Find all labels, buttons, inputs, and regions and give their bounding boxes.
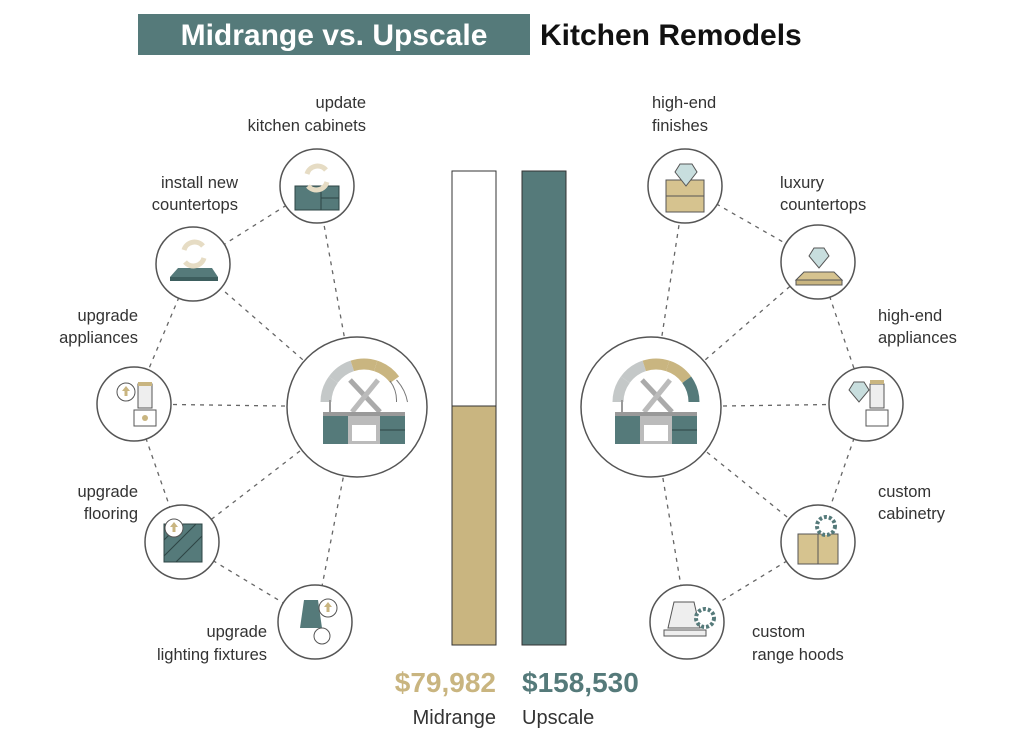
text: right labels: finishes bbox=[652, 117, 708, 135]
text: left labels: upgrade bbox=[206, 623, 267, 641]
text: right labels: range hoods bbox=[752, 646, 844, 664]
title: Kitchen Remodels bbox=[540, 19, 802, 52]
icon: luxury countertops bbox=[781, 225, 855, 299]
values: $158,530 bbox=[522, 667, 639, 698]
icon: custom cabinetry bbox=[781, 505, 855, 579]
text: left labels bbox=[59, 94, 366, 664]
text: left labels: kitchen cabinets bbox=[248, 117, 366, 135]
text: right labels: custom bbox=[752, 623, 805, 641]
bar labels: Upscale bbox=[522, 707, 594, 729]
values: $79,982 bbox=[395, 667, 496, 698]
text: left labels: countertops bbox=[152, 196, 238, 214]
icon: high-end appliances bbox=[829, 367, 903, 441]
text: right labels: appliances bbox=[878, 329, 957, 347]
text: right labels: cabinetry bbox=[878, 505, 946, 523]
icon: flooring bbox=[145, 505, 219, 579]
panel: upscale hub bbox=[581, 337, 721, 477]
values bbox=[395, 667, 639, 698]
text: right labels: high-end bbox=[878, 307, 942, 325]
icon: custom range hoods bbox=[650, 585, 724, 659]
icon: countertops bbox=[156, 227, 230, 301]
bar labels bbox=[413, 707, 594, 729]
text: left labels: update bbox=[316, 94, 366, 112]
title: Midrange vs. Upscale bbox=[181, 19, 487, 52]
text: left labels: upgrade bbox=[77, 483, 138, 501]
text: left labels: flooring bbox=[84, 505, 138, 523]
text: right labels: custom bbox=[878, 483, 931, 501]
panel: midrange hub bbox=[287, 337, 427, 477]
bar labels: Midrange bbox=[413, 707, 496, 729]
text: left labels: lighting fixtures bbox=[157, 646, 267, 664]
icon: lighting bbox=[278, 585, 352, 659]
text: left labels: install new bbox=[161, 174, 238, 192]
icon: update cabinets bbox=[280, 149, 354, 223]
text: right labels: countertops bbox=[780, 196, 866, 214]
text: left labels: upgrade bbox=[77, 307, 138, 325]
bar chart: midrange bbox=[452, 171, 496, 645]
icon: appliances bbox=[97, 367, 171, 441]
icon: high-end finishes bbox=[648, 149, 722, 223]
text: right labels: high-end bbox=[652, 94, 716, 112]
connectors bbox=[134, 186, 866, 622]
bar chart: upscale bbox=[522, 171, 566, 645]
text: right labels: luxury bbox=[780, 174, 825, 192]
text: left labels: appliances bbox=[59, 329, 138, 347]
text: right labels bbox=[652, 94, 957, 664]
title bbox=[138, 14, 802, 55]
